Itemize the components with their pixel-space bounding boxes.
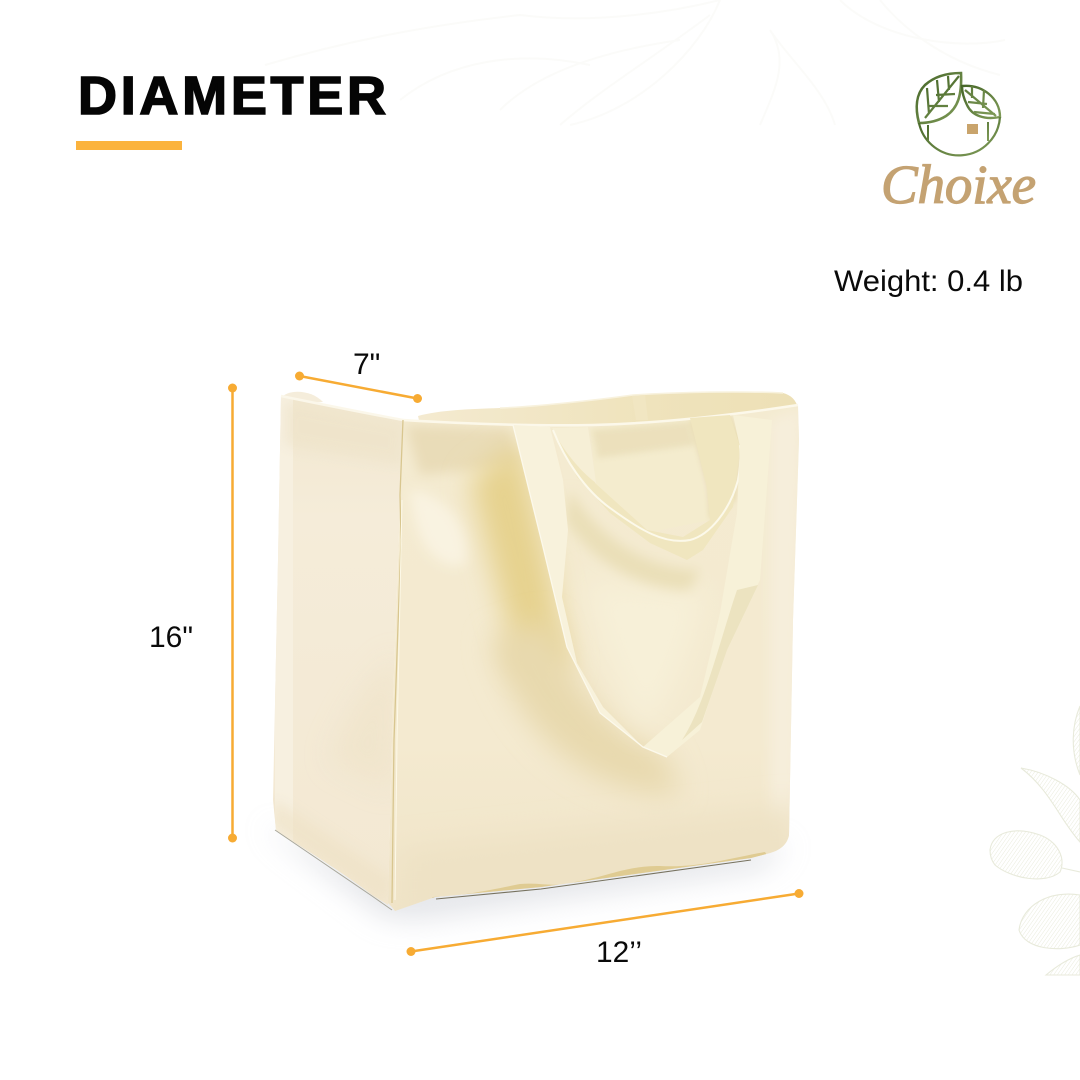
front panel <box>385 400 805 925</box>
base edges <box>275 830 392 910</box>
logo: Choixe <box>881 73 1036 215</box>
sketch: bean one <box>990 831 1062 879</box>
fabric shadow top left <box>405 425 520 475</box>
rear handle upper tab <box>552 427 596 483</box>
rear rolled corner <box>282 392 323 403</box>
front handle left strap <box>513 425 667 757</box>
shadow beneath left strap <box>490 620 680 795</box>
inner strap tab <box>632 395 648 420</box>
front rim <box>403 405 798 425</box>
dimension: 7 inch depth <box>295 348 422 403</box>
sketch: lower leaf <box>1046 955 1080 975</box>
right side light <box>772 419 796 807</box>
bag interior back wall <box>418 392 798 425</box>
side panel rim <box>281 396 403 420</box>
weight label: Weight: 0.4 lb <box>834 265 1023 298</box>
bag <box>265 385 805 925</box>
shade under loop <box>565 490 700 590</box>
dimension: 12 inch width: 12’’ <box>596 936 642 969</box>
rear handle loop <box>552 415 740 560</box>
background sketch: faint top leaves <box>265 0 1005 125</box>
highlight near seam <box>410 490 466 566</box>
background sketch: coffee plant bottom right <box>990 706 1080 975</box>
title underline <box>76 141 182 150</box>
interior rim light <box>500 392 783 408</box>
dimension: 16 inch height <box>149 384 237 842</box>
dimension: 7 inch depth: 7" <box>353 348 380 381</box>
ground shadow <box>262 825 790 920</box>
upper back panel between handles <box>590 420 710 532</box>
strap texture <box>682 585 758 740</box>
dimension: 12 inch width <box>406 889 804 969</box>
sketch: bean two <box>1019 894 1080 949</box>
side panel <box>273 397 402 905</box>
sketch: upper leaf edge <box>1073 706 1080 775</box>
bottom shade <box>414 804 790 904</box>
corner seam <box>392 420 403 903</box>
front handle right strap <box>643 415 772 757</box>
light panel between straps <box>585 580 705 730</box>
logo wordmark: Choixe <box>881 154 1036 215</box>
sketch: leaf <box>1021 768 1080 842</box>
logo icon: window <box>967 124 978 134</box>
front strap lower edge highlight <box>513 425 667 757</box>
rear handle highlight <box>553 430 741 541</box>
logo icon: leaves and house in circle <box>917 73 1000 155</box>
title: DIAMETER <box>78 66 386 126</box>
bottom gusset fold <box>432 852 766 898</box>
dimension: 16 inch height: 16" <box>149 621 193 654</box>
